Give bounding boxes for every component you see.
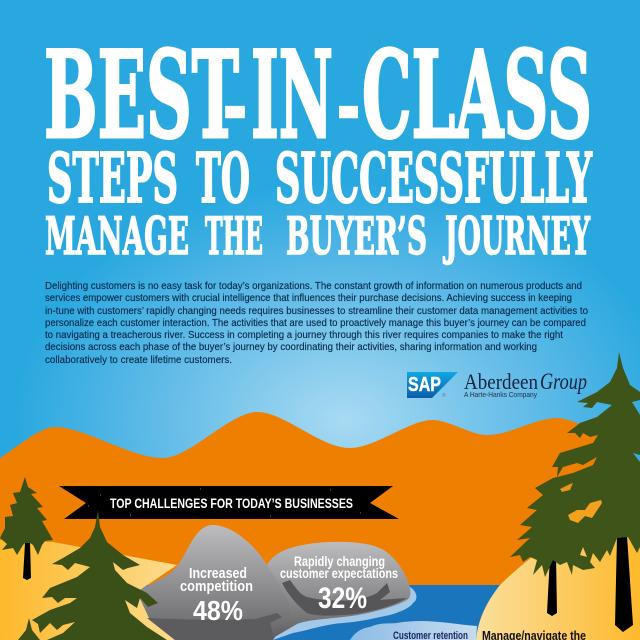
foliage bbox=[510, 352, 640, 577]
foliage bbox=[32, 510, 167, 640]
challenge: rapidly changing expectations bbox=[280, 554, 398, 615]
challenge: increased competition: competition bbox=[180, 578, 253, 595]
logo: Aberdeen Group: A Harte-Hanks Company bbox=[464, 392, 537, 399]
gap in foliage: sand bbox=[580, 547, 587, 557]
tree: big left bbox=[18, 510, 167, 640]
challenge: increased competition bbox=[180, 565, 253, 626]
banner heading: TOP CHALLENGES FOR TODAY’S BUSINESSES bbox=[110, 495, 353, 511]
title line 3: THE bbox=[205, 207, 263, 267]
challenge: rapidly changing expectations: Rapidly changing bbox=[294, 554, 385, 569]
title line 2: STEPS bbox=[47, 139, 178, 219]
banner specks bbox=[88, 489, 361, 516]
title line 1: IN bbox=[251, 25, 333, 166]
intro paragraph: personalize each customer interaction. The activities that are used to proactively manage this buyer’s journey can be compared bbox=[45, 318, 586, 329]
intro paragraph: decisions across each phase of the buyer’s journey by coordinating their activities, sharing information and working bbox=[45, 342, 537, 353]
right sand bank bbox=[476, 500, 640, 640]
challenge: increased competition: Increased bbox=[189, 565, 247, 582]
logo: Aberdeen Group bbox=[464, 369, 587, 399]
rock halo bbox=[273, 587, 416, 640]
left sand bank bbox=[0, 540, 177, 640]
title bbox=[44, 25, 593, 267]
intro paragraph: Delighting customers is no easy task for today’s organizations. The constant growth of information on numerous products and bbox=[45, 281, 582, 292]
challenge: increased competition: 48% bbox=[193, 595, 243, 626]
river bank shallow bbox=[350, 621, 477, 640]
challenge: rapidly changing expectations: customer expectations bbox=[280, 566, 398, 581]
banner: top challenges bbox=[59, 486, 399, 519]
title line 2 bbox=[47, 139, 593, 219]
foliage bbox=[0, 477, 53, 555]
gap in foliage: orange bbox=[568, 500, 602, 523]
title line 1: BEST bbox=[44, 25, 239, 166]
title line 3: MANAGE bbox=[45, 207, 189, 267]
river bbox=[130, 585, 640, 640]
logo: SAP bbox=[407, 372, 458, 399]
rock shadow branch bbox=[147, 613, 282, 640]
intro paragraph: in-tune with customers’ rapidly changing needs requires businesses to streamline their customer data management activities to bbox=[45, 306, 588, 317]
tree: small left bbox=[0, 477, 53, 580]
title line 2: TO bbox=[196, 139, 250, 219]
logo: Aberdeen Group: Group bbox=[540, 369, 587, 394]
intro paragraph: services empower customers with crucial intelligence that influences their purchase decisions. Achieving success in keeping bbox=[45, 293, 572, 304]
logo: SAP: SAP bbox=[408, 374, 441, 396]
title line 1 bbox=[44, 25, 592, 166]
intro paragraph bbox=[45, 281, 588, 366]
small foreground tree tip bbox=[18, 618, 40, 640]
rock shadow branch bbox=[282, 580, 407, 616]
logo: SAP: ® bbox=[442, 392, 446, 399]
trunk bbox=[615, 536, 633, 632]
challenge: rapidly changing expectations: 32% bbox=[318, 582, 367, 615]
intro paragraph: collaboratively to create lifetime customers. bbox=[45, 355, 232, 366]
tree: right second trunk bbox=[547, 556, 557, 616]
rock: right bbox=[260, 542, 410, 638]
title line 1: - bbox=[336, 52, 361, 158]
intro paragraph: to navigating a treacherous river. Success in completing a journey through this river requires companies to make the right bbox=[45, 330, 563, 341]
title line 3 bbox=[45, 207, 591, 267]
gap in foliage: upper speck bbox=[560, 483, 573, 492]
mountains bbox=[0, 412, 640, 600]
logo: Aberdeen Group: Aberdeen bbox=[464, 369, 538, 394]
rock: left bbox=[137, 525, 290, 640]
title line 3: BUYER’S bbox=[286, 207, 427, 267]
title line 1: - bbox=[222, 52, 248, 158]
tree: big right bbox=[510, 352, 640, 632]
trunk bbox=[23, 543, 31, 580]
